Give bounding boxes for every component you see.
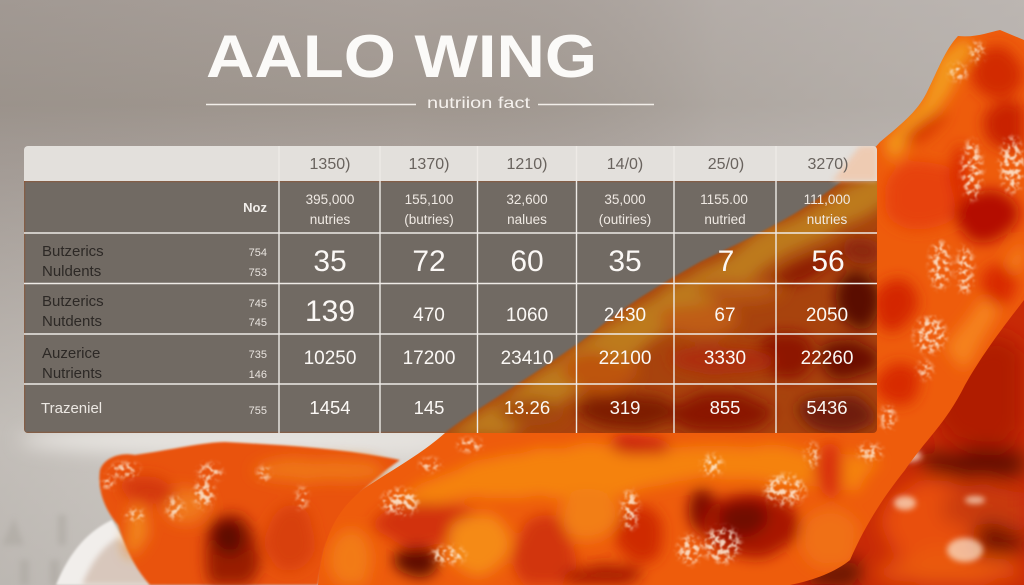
row label codes — [249, 247, 267, 417]
back wing — [780, 280, 1024, 585]
sub-header row: 1155.00 — [700, 192, 748, 207]
row label codes: 146 — [249, 369, 267, 381]
table background — [24, 146, 890, 440]
data row 3: 22260 — [801, 348, 853, 369]
data row 3: 10250 — [304, 348, 356, 369]
data row 4: 5436 — [806, 397, 848, 418]
sub-header row: (outiries) — [599, 212, 651, 227]
data row 2: 470 — [413, 305, 445, 326]
data row 1: 35 — [608, 245, 642, 278]
data row 4: 13.26 — [504, 397, 550, 418]
column headers: 3270) — [808, 156, 848, 173]
data row 4: 319 — [610, 397, 640, 418]
row label codes: 753 — [249, 267, 267, 279]
data row 1: 35 — [313, 245, 347, 278]
sub-header row: (butries) — [404, 212, 454, 227]
row labels: Butzerics — [42, 243, 104, 260]
row labels: Butzerics — [42, 293, 104, 310]
data row 4: 855 — [710, 397, 740, 418]
row label column header: Noz — [243, 200, 267, 215]
sub-header row: nutried — [704, 212, 746, 227]
wing highlight and shadow blotches — [332, 36, 1024, 585]
sub-header row: 395,000 — [306, 192, 354, 207]
sub-header row: nutries — [807, 212, 848, 227]
data row 1: 72 — [412, 245, 446, 278]
row labels: Auzerice — [42, 345, 100, 362]
data row 4: 145 — [414, 397, 444, 418]
left wing — [99, 442, 400, 585]
row labels: Nutrients — [42, 365, 102, 382]
table grid lines — [24, 146, 877, 433]
row label codes: 745 — [249, 317, 267, 329]
column headers: 1370) — [409, 156, 449, 173]
sub-header row: nalues — [507, 212, 547, 227]
row label codes: 755 — [249, 405, 267, 417]
data row 2 — [305, 295, 848, 328]
title: AALO WING — [206, 23, 597, 90]
row labels: Nutdents — [42, 313, 102, 330]
sub-header row — [306, 192, 850, 227]
column headers: 1210) — [507, 156, 547, 173]
data row 1: 7 — [718, 245, 734, 278]
column headers: 14/0) — [607, 156, 643, 173]
subtitle with rules: nutriion fact — [427, 95, 531, 112]
data row 2: 2430 — [604, 305, 646, 326]
row label codes: 754 — [249, 247, 267, 259]
data row 2: 139 — [305, 295, 355, 328]
data row 3: 3330 — [704, 348, 746, 369]
data row 3: 22100 — [599, 348, 651, 369]
data row 2: 2050 — [806, 305, 848, 326]
sub-header row: 32,600 — [506, 192, 548, 207]
data row 2: 67 — [714, 305, 736, 326]
data row 2: 1060 — [506, 305, 548, 326]
sub-header row: 35,000 — [604, 192, 646, 207]
row label codes: 745 — [249, 298, 267, 310]
data row 1: 56 — [811, 245, 845, 278]
data row 1 — [313, 245, 845, 278]
sub-header row: 155,100 — [405, 192, 453, 207]
wing glaze specks — [382, 42, 1024, 564]
data row 1: 60 — [510, 245, 544, 278]
column headers: 25/0) — [708, 156, 744, 173]
bowl — [56, 520, 170, 585]
panel: nutrition table — [24, 146, 890, 440]
data row 3: 17200 — [403, 348, 455, 369]
data row 4: 1454 — [309, 397, 351, 418]
column headers — [310, 156, 848, 173]
data row 3 — [304, 348, 853, 369]
row label codes: 735 — [249, 349, 267, 361]
row labels: Trazeniel — [41, 400, 102, 417]
sub-header row: 111,000 — [804, 192, 850, 207]
row labels — [41, 243, 104, 417]
right foreground wing — [318, 30, 1024, 585]
sub-header row: nutries — [310, 212, 351, 227]
data row 4 — [309, 397, 848, 418]
column headers: 1350) — [310, 156, 350, 173]
data row 3: 23410 — [501, 348, 553, 369]
row labels: Nuldents — [42, 263, 101, 280]
